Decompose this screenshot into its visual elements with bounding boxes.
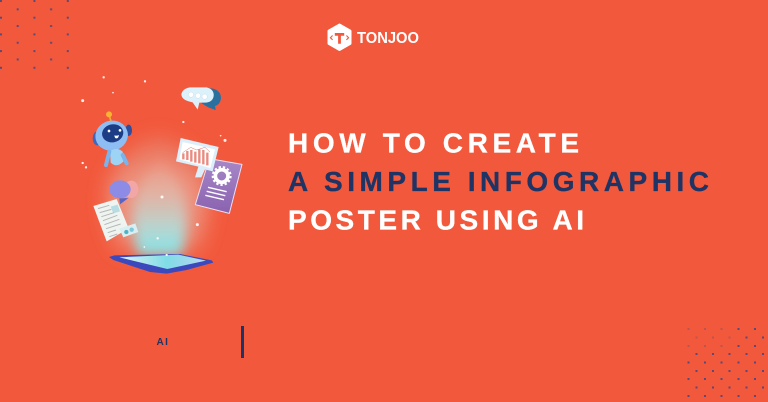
icon: text document bbox=[93, 199, 138, 241]
icon: brain bbox=[109, 180, 138, 204]
icon: purple settings document bbox=[195, 159, 242, 213]
hologram wide light glow bbox=[108, 137, 207, 250]
sparkles bbox=[81, 76, 226, 256]
dot pattern: top left bbox=[0, 0, 78, 70]
title line 1: HOW TO CREATE bbox=[288, 128, 579, 158]
icon: robot bbox=[92, 111, 132, 165]
icon: presentation chart bbox=[176, 138, 219, 177]
logo: Tonjoo bbox=[329, 25, 419, 50]
title line 3: POSTER USING AI bbox=[288, 204, 584, 236]
icon: speech bubbles bbox=[181, 87, 221, 110]
title bbox=[288, 128, 709, 236]
vertical divider bbox=[241, 326, 244, 358]
icon: logo hexagon bbox=[329, 25, 350, 50]
title line 2: A SIMPLE INFOGRAPHIC bbox=[288, 166, 709, 197]
logo wordmark: TONJOO bbox=[357, 30, 419, 47]
illustration: AI hologram from tablet bbox=[81, 76, 242, 274]
hologram core light bbox=[133, 160, 186, 255]
dot pattern: bottom right bbox=[688, 328, 764, 397]
icon: tablet bbox=[109, 254, 213, 274]
category label: AI bbox=[156, 337, 169, 348]
